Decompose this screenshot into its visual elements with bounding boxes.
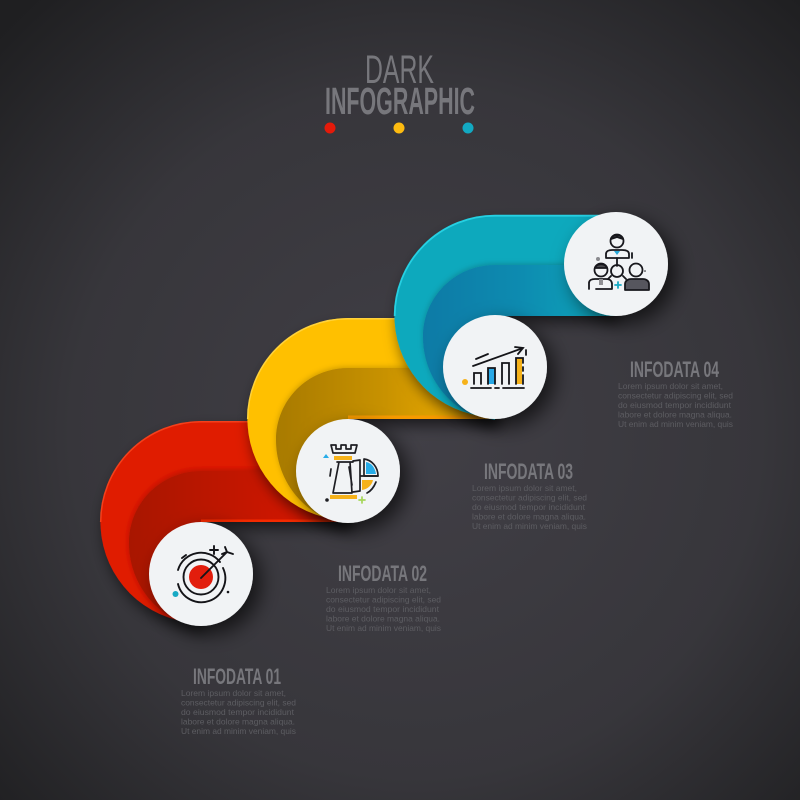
text block: infodata 03: Lorem ipsum dolor sit amet, [472, 483, 577, 493]
step 2 circle with strategy icon [296, 419, 400, 523]
text block: infodata 03: consectetur adipiscing elit, sed [472, 492, 587, 502]
text block: infodata 03: INFODATA 03 [484, 459, 573, 484]
text block: infodata 01: Lorem ipsum dolor sit amet, [181, 688, 286, 698]
text block: infodata 04: Lorem ipsum dolor sit amet, [618, 381, 723, 391]
title colour dots [324, 122, 474, 134]
step 3 circle with growth chart icon [443, 315, 547, 419]
title [325, 48, 475, 123]
step 1 circle with target icon [149, 522, 253, 626]
ribbon: yellow step 2 [247, 318, 495, 523]
icon: rising bar chart [462, 347, 526, 388]
text block: infodata 04 [618, 357, 733, 429]
text block: infodata 01: do eiusmod tempor incididunt [181, 707, 295, 717]
text block: infodata 04: do eiusmod tempor incididunt [618, 400, 732, 410]
text block: infodata 03 [472, 459, 587, 531]
text block: infodata 02: Ut enim ad minim veniam, quis [326, 623, 441, 633]
text block: infodata 03: Ut enim ad minim veniam, quis [472, 521, 587, 531]
text block: infodata 03: do eiusmod tempor incididunt [472, 502, 586, 512]
title: INFOGRAPHIC [325, 81, 475, 123]
ribbon: teal step 3 [394, 215, 616, 420]
icon: chess rook and pie chart [323, 445, 378, 503]
text block: infodata 04: consectetur adipiscing elit, sed [618, 390, 733, 400]
text block: infodata 01: INFODATA 01 [193, 664, 281, 689]
title: DARK [365, 48, 434, 92]
text block: infodata 02: Lorem ipsum dolor sit amet, [326, 585, 431, 595]
text block: infodata 04: labore et dolore magna aliqua. [618, 410, 732, 420]
text block: infodata 01: consectetur adipiscing elit, sed [181, 698, 296, 708]
text block: infodata 02: INFODATA 02 [338, 561, 427, 586]
text block: infodata 01: Ut enim ad minim veniam, quis [181, 726, 296, 736]
text block: infodata 02: do eiusmod tempor incididunt [326, 604, 440, 614]
text block: infodata 04: INFODATA 04 [630, 357, 719, 382]
icon: team hierarchy [589, 234, 649, 290]
ribbon: red step 1 [100, 421, 348, 626]
text block: infodata 01 [181, 664, 296, 736]
step 4 circle with team icon [564, 212, 668, 316]
text block: infodata 04: Ut enim ad minim veniam, quis [618, 419, 733, 429]
text block: infodata 03: labore et dolore magna aliqua. [472, 512, 586, 522]
text block: infodata 02 [326, 561, 441, 633]
text block: infodata 02: consectetur adipiscing elit, sed [326, 594, 441, 604]
icon: target and arrow [172, 546, 233, 602]
text block: infodata 02: labore et dolore magna aliqua. [326, 614, 440, 624]
text block: infodata 01: labore et dolore magna aliqua. [181, 716, 295, 726]
